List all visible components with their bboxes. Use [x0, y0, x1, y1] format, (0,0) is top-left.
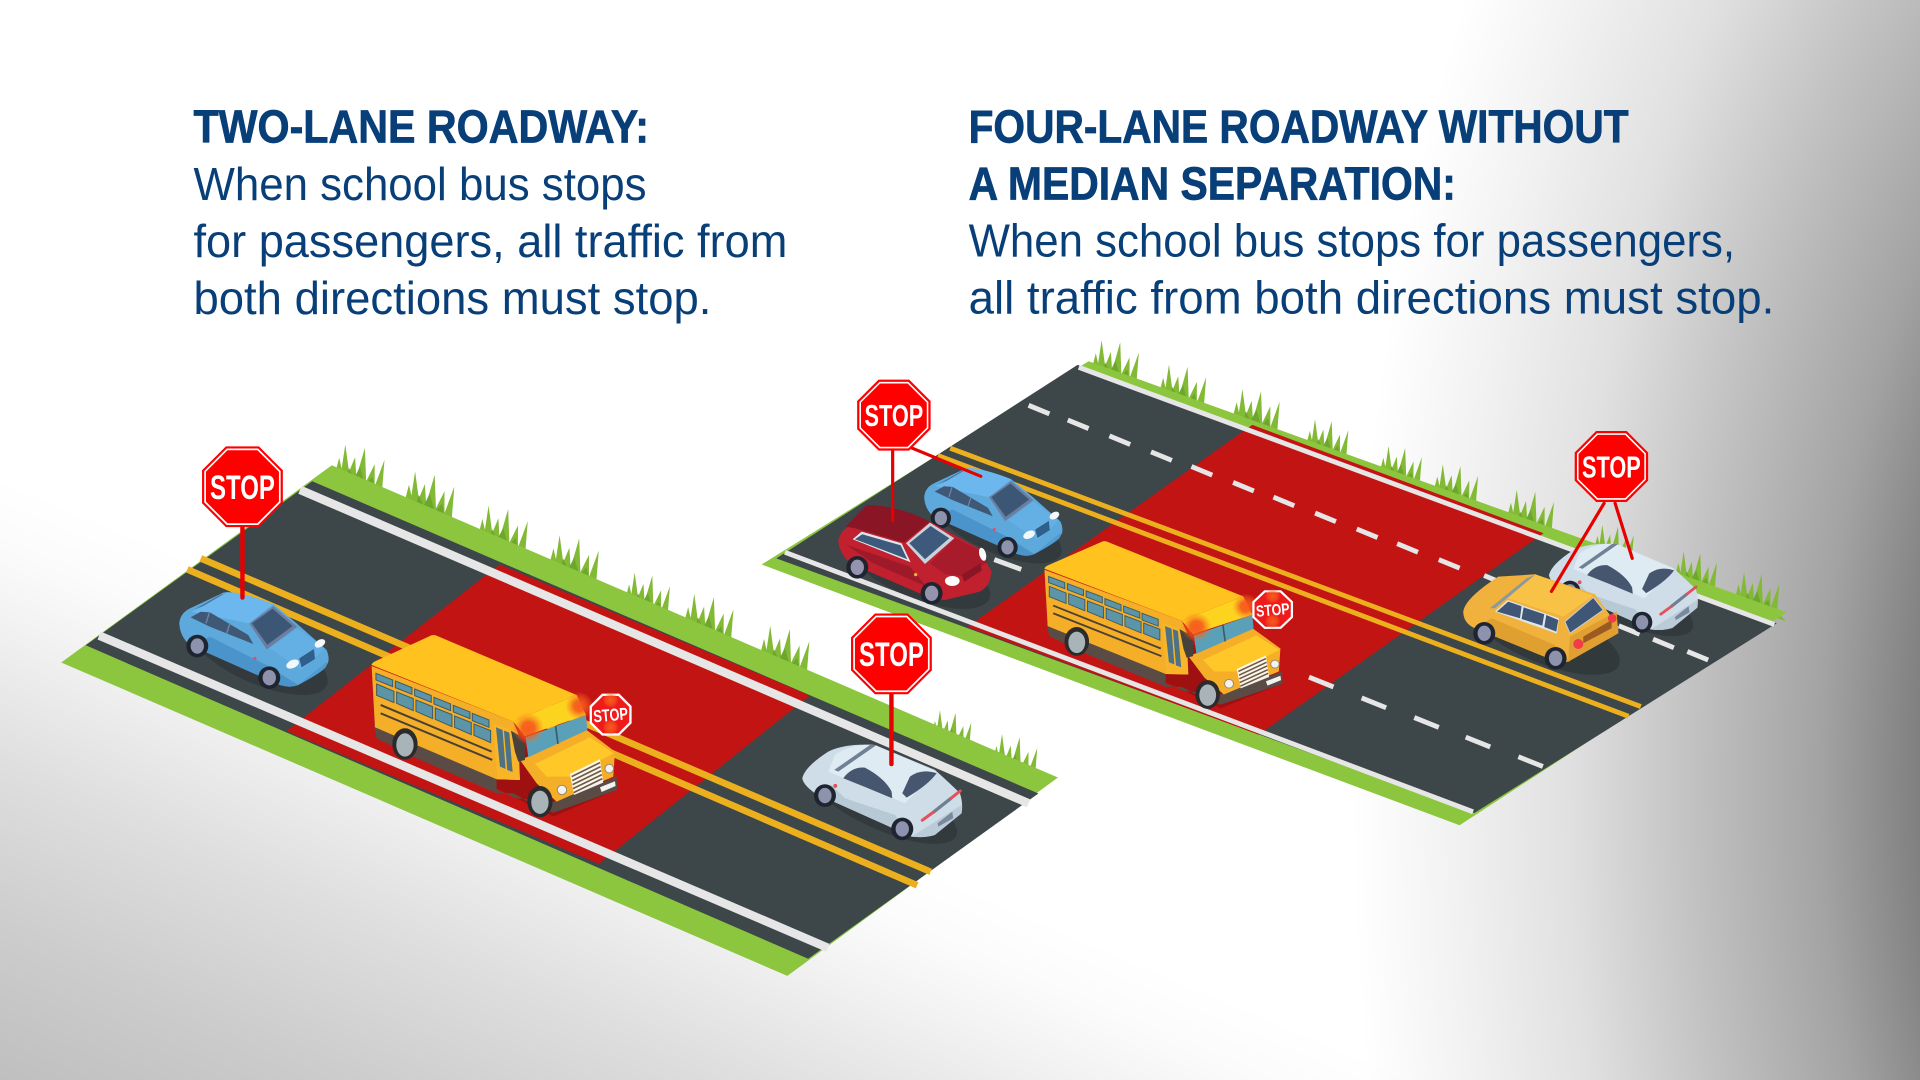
panel: four-lane road illustration	[762, 332, 1787, 825]
heading: four-lane roadway	[969, 101, 1629, 210]
text block: four-lane rule	[969, 215, 1774, 323]
double yellow centre line	[938, 448, 1641, 716]
stop sign: right two-lane	[851, 613, 932, 764]
bus stop arm sign: STOP	[593, 703, 629, 726]
double yellow centre line	[187, 558, 931, 885]
heading: two-lane roadway: TWO-LANE ROADWAY:	[193, 101, 649, 153]
bus stop arm sign	[590, 692, 632, 736]
panel: four-lane roadway text	[969, 101, 1774, 323]
school bus	[372, 635, 632, 817]
stop sign: left four-lane	[857, 380, 981, 520]
car: blue	[178, 592, 338, 711]
white edge lines	[785, 367, 1774, 812]
stop sign: right two-lane: STOP	[859, 636, 924, 674]
stop sign: right four-lane	[1551, 431, 1648, 591]
car: red	[837, 505, 1000, 625]
bus stop arm sign: STOP	[1255, 600, 1290, 621]
text block: two-lane rule	[193, 158, 787, 324]
heading: four-lane roadway: A MEDIAN SEPARATION:	[969, 158, 1456, 210]
stop sign: right four-lane: STOP	[1582, 451, 1641, 485]
red stop zone	[967, 425, 1544, 735]
text block: two-lane rule: When school bus stops	[193, 158, 647, 210]
grass tufts left road	[334, 435, 1044, 787]
text block: two-lane rule: for passengers, all traffic from	[193, 215, 787, 267]
stop sign: left two-lane	[202, 446, 283, 598]
road surface: grass and asphalt	[762, 361, 1787, 825]
car: blue	[923, 468, 1071, 579]
car: yellow	[1460, 574, 1630, 691]
grass tufts right road	[1091, 332, 1786, 622]
white dashed lane lines	[994, 405, 1708, 767]
text block: four-lane rule: all traffic from both directions must stop.	[969, 271, 1774, 323]
car: white	[1546, 544, 1703, 651]
panel: two-lane road illustration	[61, 435, 1058, 976]
road surface: grass and asphalt	[61, 465, 1058, 976]
stop sign: left two-lane: STOP	[210, 469, 275, 507]
white edge lines	[99, 490, 1029, 948]
heading: four-lane roadway: FOUR-LANE ROADWAY WITHOUT	[969, 101, 1629, 153]
text block: four-lane rule: When school bus stops for passengers,	[969, 215, 1735, 267]
bus stop arm sign	[1252, 589, 1293, 629]
text block: two-lane rule: both directions must stop.	[193, 272, 711, 324]
stop sign: left four-lane: STOP	[864, 399, 923, 433]
red stop zone	[287, 564, 810, 864]
panel: two-lane roadway text	[193, 101, 787, 324]
school bus	[1044, 541, 1293, 709]
car: white	[799, 745, 967, 860]
